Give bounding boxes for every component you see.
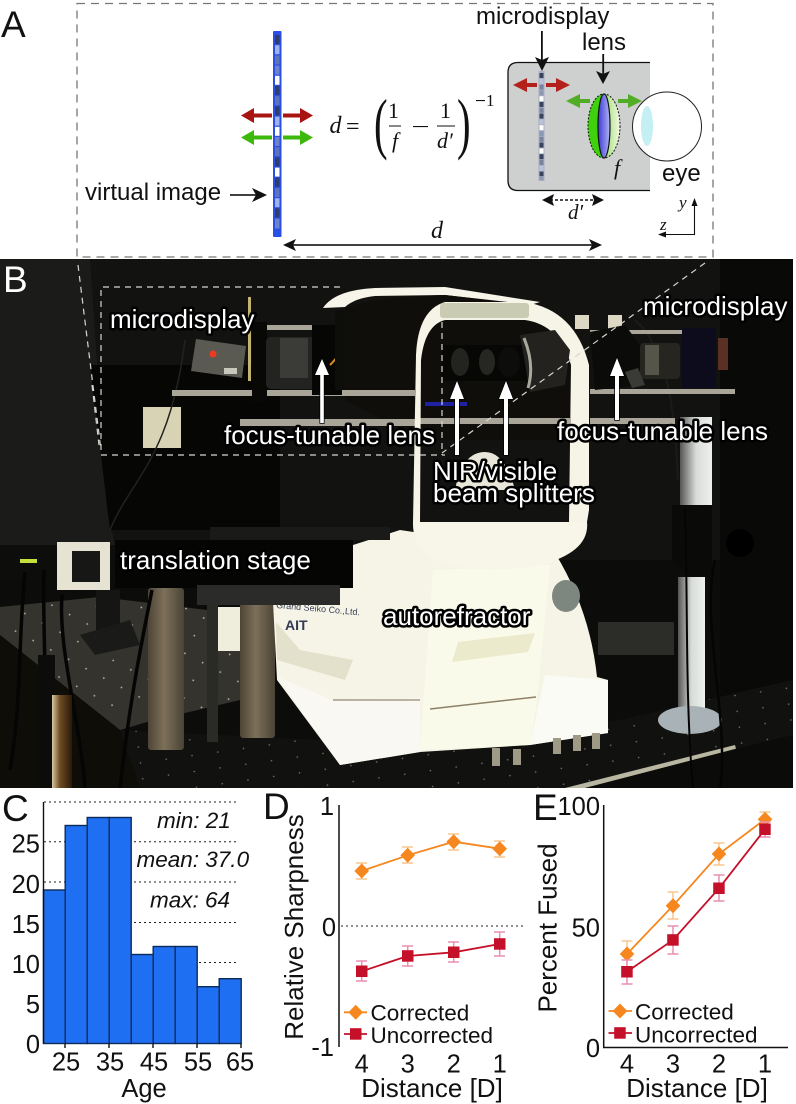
autorefractor body: Grand Seiko Co.,Ltd. bbox=[276, 600, 360, 617]
label: focus-tunable lens left: focus-tunable lens bbox=[224, 420, 435, 450]
photo background bbox=[0, 560, 720, 788]
y ticks: 50 bbox=[572, 915, 600, 943]
y ticks: -1 bbox=[311, 1034, 334, 1062]
black knob bbox=[726, 529, 754, 557]
white blocks near top bbox=[575, 315, 622, 329]
label: f: f bbox=[614, 155, 623, 180]
x tick labels: 65 bbox=[226, 1049, 254, 1077]
y ticks: 0 bbox=[322, 914, 336, 942]
y label: Relative Sharpness bbox=[279, 814, 309, 1040]
label: eye: eye bbox=[662, 160, 701, 187]
series corrected bbox=[354, 834, 507, 878]
x label: Distance [D] bbox=[361, 1073, 503, 1103]
arch bottom bar bbox=[412, 522, 588, 559]
arrow: to lens bbox=[596, 54, 610, 84]
equation: = bbox=[346, 114, 360, 140]
x ticks bbox=[620, 1051, 772, 1079]
autorefractor body bbox=[218, 530, 608, 765]
y tick labels: 25 bbox=[12, 831, 40, 859]
dark shelf bbox=[598, 622, 674, 655]
panel C: age histogram bbox=[12, 802, 254, 1103]
stats: mean: 37.0 bbox=[136, 847, 250, 872]
panel letter A: A bbox=[1, 4, 26, 45]
icon: red arrows around virtual image bbox=[241, 108, 313, 123]
bolts bbox=[492, 733, 600, 766]
autorefractor body: AIT bbox=[285, 617, 308, 633]
panel letter D: D bbox=[263, 786, 290, 827]
legend: Corrected bbox=[370, 1000, 469, 1026]
x tick labels: 55 bbox=[184, 1049, 212, 1077]
label: microdisplay left: microdisplay bbox=[110, 304, 254, 334]
equation: d′ bbox=[437, 128, 454, 153]
blue reflection bbox=[425, 402, 467, 406]
equation: ) bbox=[457, 87, 471, 162]
axes: y and z: y bbox=[677, 193, 687, 212]
equation: 1 bbox=[388, 98, 399, 123]
icon: red arrows around microdisplay bbox=[513, 78, 570, 92]
right lens assembly bbox=[590, 325, 728, 390]
axis bbox=[338, 805, 340, 1047]
microdisplay strip bbox=[538, 71, 544, 181]
cable base bbox=[38, 655, 55, 678]
y ticks bbox=[557, 793, 600, 1063]
cylindrical posts bbox=[148, 588, 275, 750]
pale strip bbox=[248, 297, 251, 381]
x ticks bbox=[355, 1051, 507, 1079]
left lens assembly bbox=[252, 322, 345, 396]
x ticks: 1 bbox=[758, 1051, 772, 1079]
forehead rest bbox=[440, 303, 529, 318]
x ticks: 1 bbox=[493, 1051, 507, 1079]
handle recess bbox=[452, 633, 535, 662]
label: NIR/visible: NIR/visible bbox=[433, 456, 557, 486]
y tick labels: 5 bbox=[26, 991, 40, 1019]
label: d prime: d′ bbox=[568, 200, 584, 224]
x ticks: 3 bbox=[401, 1051, 415, 1079]
x ticks: 4 bbox=[355, 1051, 369, 1079]
x ticks: 2 bbox=[712, 1051, 726, 1079]
label: microdisplay: microdisplay bbox=[476, 3, 609, 30]
right lens center bbox=[520, 330, 570, 392]
legend bbox=[608, 1000, 758, 1048]
y tick labels: 15 bbox=[12, 911, 40, 939]
equation: ( bbox=[374, 87, 388, 162]
axes: y and z: z bbox=[659, 215, 667, 234]
tunable lens bbox=[588, 94, 620, 158]
dashed arrow d prime bbox=[542, 194, 604, 206]
dark head shell bbox=[349, 295, 590, 424]
legend: Corrected bbox=[635, 1000, 734, 1024]
stats: max: 64 bbox=[150, 888, 230, 912]
table dark front right bbox=[585, 735, 793, 788]
icon: green arrows around lens bbox=[566, 94, 642, 108]
panel E: percent fused chart bbox=[533, 793, 788, 1103]
legend bbox=[344, 1000, 493, 1048]
label: autorefractor: autorefractor bbox=[383, 601, 531, 631]
legend: Uncorrected bbox=[370, 1023, 493, 1048]
zero line bbox=[341, 925, 524, 927]
label: beam splitters: beam splitters bbox=[433, 478, 595, 508]
y tick labels bbox=[12, 831, 40, 1059]
dark instrument mount bbox=[90, 365, 280, 530]
cables bbox=[10, 320, 722, 788]
arch head frame bbox=[413, 302, 589, 522]
dashed inset frame bbox=[78, 263, 705, 455]
x tick labels: 25 bbox=[52, 1049, 80, 1077]
optical rods over shell bbox=[345, 390, 570, 426]
equation: d bbox=[330, 113, 342, 139]
x tick labels: 45 bbox=[140, 1049, 168, 1077]
equation bbox=[330, 87, 494, 162]
error bars uncorrected bbox=[622, 822, 770, 984]
virtual image bar bbox=[273, 31, 282, 237]
white arrows bbox=[315, 358, 624, 455]
brass strip bbox=[52, 695, 72, 788]
equation: f bbox=[392, 128, 401, 153]
top strap bbox=[323, 287, 540, 308]
label: focus-tunable lens right: focus-tunable lens bbox=[557, 416, 768, 446]
axes: y and z bbox=[658, 193, 698, 238]
equation: 1 bbox=[440, 98, 451, 123]
x label: Distance [D] bbox=[626, 1073, 768, 1103]
error bars corrected bbox=[622, 812, 770, 967]
arrow: to microdisplay bbox=[535, 31, 549, 71]
x axis label: Age bbox=[121, 1075, 167, 1103]
y label: Percent Fused bbox=[533, 843, 563, 1013]
grey knob bbox=[552, 580, 580, 612]
label: microdisplay right: microdisplay bbox=[643, 291, 788, 321]
series corrected bbox=[620, 812, 772, 962]
x tick labels: 35 bbox=[96, 1049, 124, 1077]
histogram bars bbox=[44, 818, 241, 1044]
error bars uncorrected bbox=[356, 932, 505, 981]
circuit board bbox=[191, 339, 246, 378]
white chin dome bbox=[455, 452, 515, 490]
y tick labels: 10 bbox=[12, 951, 40, 979]
label: lens: lens bbox=[582, 29, 626, 56]
y tick labels: 0 bbox=[26, 1031, 40, 1059]
cream cylinder bbox=[143, 407, 181, 448]
axes bbox=[604, 805, 788, 1048]
error bars corrected bbox=[356, 834, 505, 879]
legend: Uncorrected bbox=[635, 1022, 758, 1048]
label: virtual image: virtual image bbox=[85, 179, 221, 206]
icon: green arrows around virtual image bbox=[241, 130, 313, 145]
label: d: d bbox=[431, 218, 444, 244]
x ticks: 4 bbox=[620, 1051, 634, 1079]
stats bbox=[136, 808, 250, 912]
grid lines bbox=[44, 802, 239, 962]
equation: 1 bbox=[486, 91, 494, 110]
long distance arrow d bbox=[283, 239, 602, 251]
label: translation stage: translation stage bbox=[120, 545, 311, 575]
series uncorrected bbox=[356, 938, 506, 977]
y ticks: 1 bbox=[320, 793, 334, 821]
beam splitter windows bbox=[451, 347, 520, 377]
eye bbox=[632, 92, 702, 161]
panel B: photograph of the apparatus bbox=[0, 259, 793, 788]
optical table left bbox=[0, 597, 240, 730]
panel D: relative sharpness chart bbox=[279, 793, 524, 1103]
y ticks: 100 bbox=[557, 793, 600, 821]
back wall bbox=[0, 259, 115, 545]
panel A: optical diagram bbox=[77, 3, 713, 257]
rods bbox=[172, 325, 735, 426]
panel letter B: B bbox=[3, 259, 28, 300]
table edge stripe bbox=[565, 745, 736, 788]
gray display housing bbox=[508, 62, 650, 190]
x tick labels bbox=[52, 1049, 254, 1077]
dashed zoom frame bbox=[77, 4, 713, 257]
right support pillar bbox=[658, 417, 722, 734]
y ticks: 0 bbox=[586, 1035, 600, 1063]
arrow: to virtual image bbox=[230, 188, 267, 202]
panel letter C: C bbox=[2, 788, 29, 829]
series uncorrected bbox=[621, 824, 771, 978]
x ticks: 3 bbox=[666, 1051, 680, 1079]
optical table bottom bbox=[120, 680, 793, 788]
x ticks: 2 bbox=[447, 1051, 461, 1079]
optical table front lower bbox=[0, 635, 120, 730]
y tick labels: 20 bbox=[12, 871, 40, 899]
panel letter E: E bbox=[533, 787, 558, 828]
axis bbox=[44, 802, 241, 1048]
translation stage bbox=[0, 527, 390, 655]
y ticks bbox=[311, 793, 336, 1062]
stats: min: 21 bbox=[157, 808, 231, 833]
